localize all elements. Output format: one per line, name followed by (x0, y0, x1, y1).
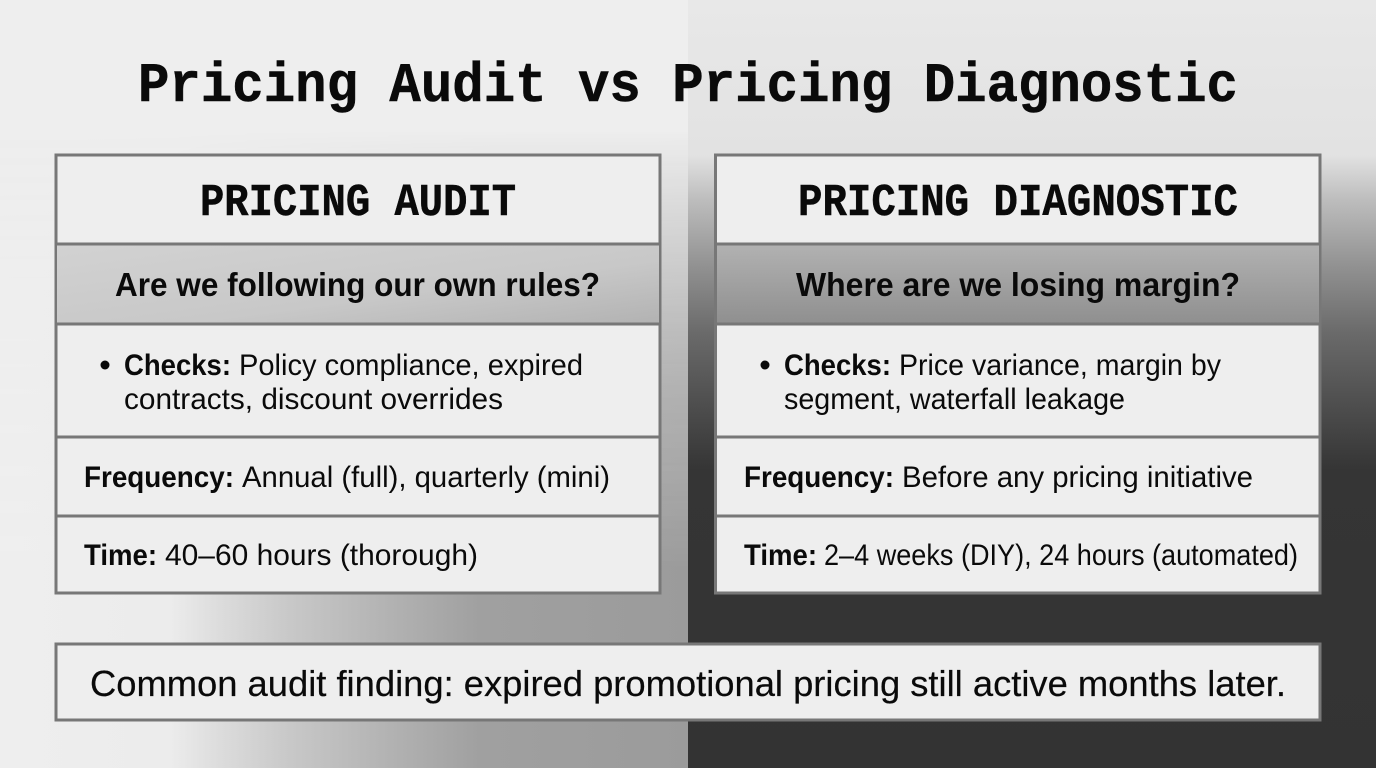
checks row (100, 349, 583, 416)
panel background (716, 155, 1320, 593)
checks row: Policy compliance, expired (239, 349, 583, 382)
time row: Time: (744, 539, 817, 572)
frequency row: Frequency: (744, 461, 894, 494)
panel heading: PRICING DIAGNOSTIC (798, 178, 1238, 229)
panel: pricing audit (56, 155, 660, 593)
frequency row: Annual (full), quarterly (mini) (242, 461, 610, 494)
frequency row: Before any pricing initiative (902, 461, 1253, 494)
background: left half gradient (189, 160, 688, 768)
background: right half (688, 0, 1376, 768)
frequency row (744, 461, 1253, 494)
checks row: Checks: (784, 349, 891, 382)
background: left half (0, 0, 688, 768)
checks row: Price variance, margin by (899, 349, 1221, 382)
time row: Time: (84, 539, 157, 572)
title: Pricing Audit vs Pricing Diagnostic (138, 54, 1238, 118)
panel heading: PRICING AUDIT (200, 178, 516, 229)
question: Where are we losing margin? (796, 266, 1240, 303)
question band (717, 244, 1319, 324)
question: Are we following our own rules? (115, 266, 600, 303)
time row: 2–4 weeks (DIY), 24 hours (automated) (824, 539, 1298, 572)
frequency row: Frequency: (84, 461, 234, 494)
checks row: Checks: (124, 349, 231, 382)
checks row: contracts, discount overrides (124, 383, 503, 416)
panel background (56, 155, 660, 593)
callout text: Common audit finding: expired promotional pricing still active months later. (90, 663, 1286, 704)
time row: 40–60 hours (thorough) (165, 539, 478, 572)
frequency row (84, 461, 610, 494)
callout (56, 644, 1320, 720)
checks row: segment, waterfall leakage (784, 383, 1125, 416)
panel: pricing diagnostic (716, 155, 1320, 593)
checks row (760, 349, 1221, 416)
question band (57, 244, 659, 324)
